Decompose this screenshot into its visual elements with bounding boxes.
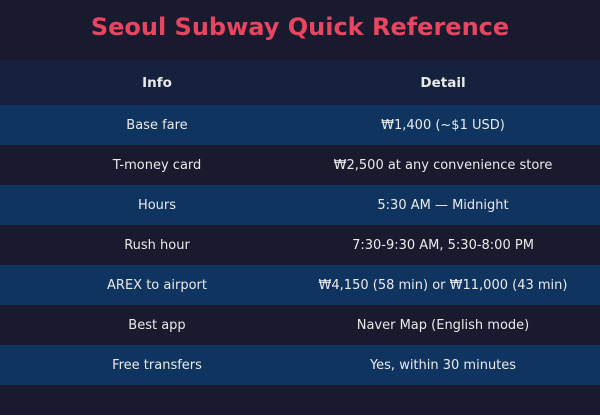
title: Seoul Subway Quick Reference — [91, 13, 509, 41]
header row: Info — [142, 74, 172, 90]
row: base fare — [0, 105, 600, 145]
row: rush hour — [124, 238, 534, 252]
row: arex — [0, 265, 600, 305]
row: arex: ₩4,150 (58 min) or ₩11,000 (43 min) — [319, 278, 567, 292]
header row — [0, 60, 600, 105]
row: t-money: T-money card — [113, 158, 201, 172]
row: base fare: Base fare — [126, 118, 188, 132]
row: hours: 5:30 AM — Midnight — [377, 198, 509, 212]
row: free transfers: Free transfers — [112, 358, 202, 372]
table — [0, 60, 600, 385]
row: t-money — [112, 158, 552, 172]
row: best app: Naver Map (English mode) — [357, 318, 529, 332]
row: t-money: ₩2,500 at any convenience store — [334, 158, 552, 172]
row: free transfers: Yes, within 30 minutes — [370, 358, 516, 372]
row: best app — [128, 318, 529, 332]
row: free transfers — [0, 345, 600, 385]
row: hours — [0, 185, 600, 225]
header row: Detail — [420, 74, 466, 90]
row: rush hour: Rush hour — [124, 238, 190, 252]
row: best app: Best app — [128, 318, 186, 332]
row: rush hour: 7:30-9:30 AM, 5:30-8:00 PM — [352, 238, 534, 252]
row: base fare: ₩1,400 (~$1 USD) — [381, 118, 505, 132]
row: arex: AREX to airport — [107, 278, 207, 292]
row: hours: Hours — [138, 198, 176, 212]
